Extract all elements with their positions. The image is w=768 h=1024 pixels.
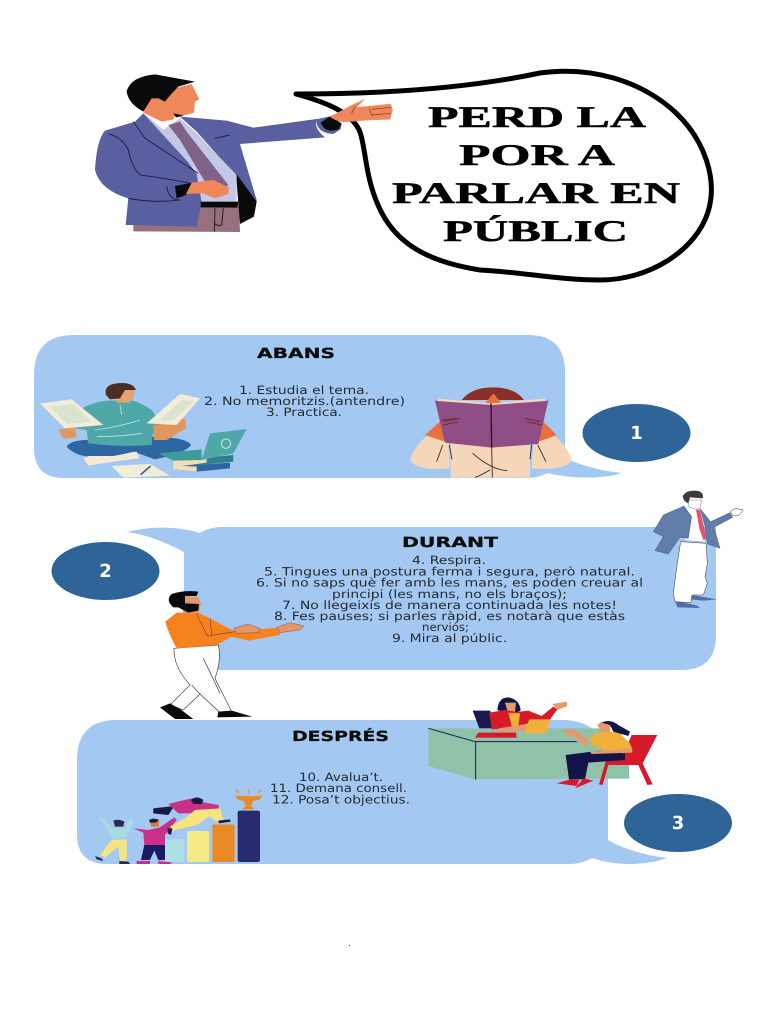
list: abans: [204, 383, 405, 419]
list: després: 10. Avalua’t.: [299, 770, 383, 784]
list: després: [270, 770, 410, 806]
illustration: climbing to success bars and trophy: [95, 789, 262, 864]
panel: abans: [34, 335, 622, 478]
number badge 2: [52, 542, 160, 600]
list: durant: 9. Mira al públic.: [392, 631, 507, 645]
illustration: meeting at desk: [428, 697, 657, 788]
footer dot: .: [348, 938, 351, 949]
number badge 1: 1: [630, 423, 643, 444]
panel: després: [77, 720, 667, 864]
number badge 3: 3: [672, 813, 684, 834]
list: durant: nerviós;: [422, 620, 469, 634]
list: durant: 7. No llegeixis de manera continuada les notes!: [282, 598, 617, 612]
presenter man illustration: [95, 74, 393, 232]
title text: PARLAR EN: [392, 177, 681, 210]
list: després: 11. Demana consell.: [270, 781, 407, 795]
heading: abans: ABANS: [257, 346, 335, 362]
number badge 2: 2: [99, 561, 112, 582]
illustration: person reading a book: [410, 387, 572, 478]
title text: PERD LA: [428, 101, 647, 134]
title text: POR A: [459, 139, 616, 172]
list: durant: 6. Si no saps què fer amb les mans, es poden creuar al: [256, 576, 643, 590]
title text: PÚBLIC: [443, 215, 628, 248]
list: després: 12. Posa’t objectius.: [272, 792, 410, 806]
list: durant: 4. Respira.: [412, 553, 486, 567]
heading: després: DESPRÉS: [292, 728, 389, 745]
title speech bubble: [296, 71, 711, 280]
illustration: bearded man in orange sweater walking: [160, 591, 304, 719]
illustration: standing man in suit with red tie: [653, 491, 743, 608]
panel: durant: [127, 527, 716, 670]
list: durant: 8. Fes pauses; si parles ràpid, es notarà que estàs: [274, 609, 625, 623]
list: abans: 2. No memoritzis.(antendre): [204, 394, 405, 408]
list: durant: [256, 553, 643, 645]
heading: durant: DURANT: [402, 535, 499, 551]
list: durant: principi (les mans, no els braços);: [332, 587, 567, 601]
title text: [392, 101, 681, 248]
number badge 1: [582, 404, 690, 462]
number badge 3: [624, 794, 732, 852]
list: abans: 3. Practica.: [266, 405, 342, 419]
list: abans: 1. Estudia el tema.: [239, 383, 369, 397]
illustration: student with papers and laptop: [40, 383, 247, 478]
list: durant: 5. Tingues una postura ferma i segura, però natural.: [264, 564, 635, 578]
icon: trophy: [236, 789, 262, 809]
